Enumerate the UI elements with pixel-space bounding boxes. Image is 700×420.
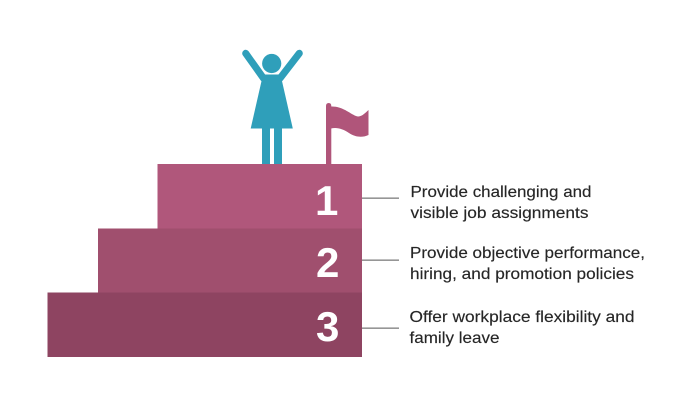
connector line 3: [362, 328, 399, 329]
icon: woman with raised arms: [246, 53, 299, 164]
text: item 1: [410, 184, 592, 222]
text: item 3: family leave: [410, 330, 500, 347]
step 2: [98, 228, 362, 292]
text: item 2: [410, 245, 645, 283]
text: item 3: [410, 309, 634, 347]
connector line 1: [362, 198, 399, 199]
step 3: 3: [316, 303, 339, 350]
step 3: [48, 292, 362, 357]
staircase: [48, 164, 362, 357]
connector line 2: [362, 260, 399, 261]
text: item 3: Offer workplace flexibility and: [410, 309, 634, 326]
text: item 1: visible job assignments: [410, 205, 588, 222]
step 1: [158, 164, 362, 228]
text: item 1: Provide challenging and: [410, 184, 592, 201]
step 2: 2: [316, 239, 339, 286]
icon: flag: [326, 103, 368, 164]
text: item 2: hiring, and promotion policies: [410, 266, 634, 283]
step 1: 1: [315, 177, 338, 224]
text: item 2: Provide objective performance,: [410, 245, 645, 262]
